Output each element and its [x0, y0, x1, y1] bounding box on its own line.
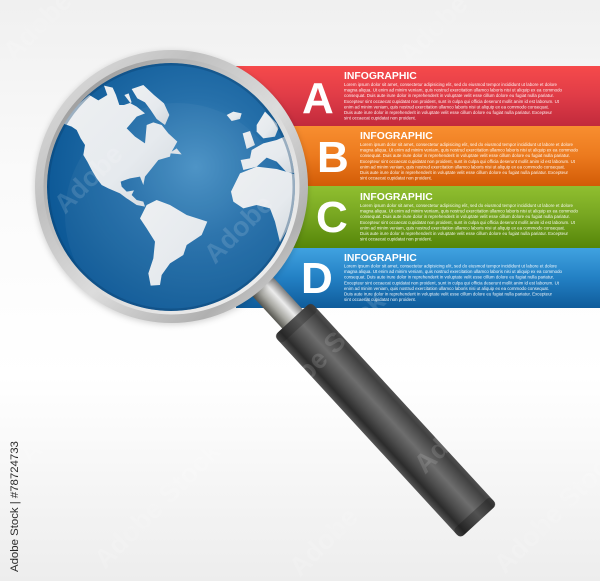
- watermarks: Adobe Stock: [88, 436, 227, 574]
- body text C: sint occaecat cupidatat non proident.: [360, 237, 432, 242]
- Scandinavia: [257, 112, 278, 138]
- heading A: INFOGRAPHIC: [344, 71, 417, 82]
- watermarks: Adobe: [283, 502, 364, 581]
- grip top cap: [274, 302, 318, 344]
- body text D: Duis aute irure dolor in reprehenderit in voluptate velit esse cillum dolore eu fugiat nulla pariatur. Excepteur: [344, 292, 553, 296]
- body text A: sint occaecat cupidatat non proident.: [344, 116, 416, 121]
- Africa: [231, 167, 300, 242]
- ribbon D: blue: [236, 248, 600, 308]
- letter C: C: [316, 193, 348, 242]
- body text A: [344, 82, 563, 121]
- ribbon B: orange: [236, 126, 600, 186]
- body text B: sint occaecat cupidatat non proident.: [360, 176, 432, 181]
- body text B: Duis aute irure dolor in reprehenderit in voluptate velit esse cillum dolore eu fugiat nulla pariatur. Excepteur: [360, 170, 569, 175]
- body text D: enim ad minim veniam, quis nostrud exercitation ullamco laboris nisi ut aliquip ex ea commodo consequat.: [344, 286, 549, 291]
- body text B: [360, 142, 579, 181]
- ribbon C: green: [236, 186, 600, 248]
- body text D: consequat. Duis aute irure dolor in reprehenderit in voluptate velit esse cillum dolore eu fugiat nulla pariatur.: [344, 275, 554, 280]
- stock credit: Adobe Stock | #78724733: [9, 441, 21, 572]
- inner glass highlight: [65, 155, 280, 308]
- watermarks: Adobe Stock: [13, 331, 152, 469]
- letter A: A: [302, 74, 334, 123]
- body text A: Duis aute irure dolor in reprehenderit in voluptate velit esse cillum dolore eu fugiat nulla pariatur. Excepteur: [344, 110, 553, 115]
- South America: [140, 200, 207, 286]
- body text A: magna aliqua. Ut enim ad minim veniam, quis nostrud exercitation ullamco laboris nisi ut aliquip ex ea commodo: [344, 88, 563, 93]
- body text C: Lorem ipsum dolor sit amet, consectetur adipisicing elit, sed do eiusmod tempor incididunt ut labore et dolore: [360, 203, 574, 208]
- body text B: enim ad minim veniam, quis nostrud exercitation ullamco laboris nisi ut aliquip ex ea commodo consequat.: [360, 164, 565, 169]
- continents: [63, 85, 300, 286]
- body text D: Lorem ipsum dolor sit amet, consectetur adipisicing elit, sed do eiusmod tempor incididunt ut labore et dolore: [344, 264, 558, 268]
- body text A: consequat. Duis aute irure dolor in reprehenderit in voluptate velit esse cillum dolore eu fugiat nulla pariatur.: [344, 93, 554, 98]
- heading C: INFOGRAPHIC: [360, 192, 433, 203]
- watermarks: Adobe: [48, 139, 129, 219]
- body text B: Excepteur sint occaecat cupidatat non proident, sunt in culpa qui officia deserunt mollit anim id est laborum. Ut: [360, 159, 576, 164]
- body text C: enim ad minim veniam, quis nostrud exercitation ullamco laboris nisi ut aliquip ex ea commodo consequat.: [360, 225, 565, 230]
- lens with world map: [47, 63, 300, 327]
- letter B: B: [317, 133, 349, 182]
- Arctic islands: [132, 85, 169, 125]
- body text C: Duis aute irure dolor in reprehenderit in voluptate velit esse cillum dolore eu fugiat nulla pariatur. Excepteur: [360, 231, 569, 236]
- watermarks: Adobe Stock: [253, 286, 392, 424]
- heading D: INFOGRAPHIC: [344, 253, 417, 264]
- ribbon A: red: [236, 66, 600, 126]
- body text C: [360, 203, 579, 242]
- magnifying glass handle: [239, 264, 497, 538]
- body text A: enim ad minim veniam, quis nostrud exercitation ullamco laboris nisi ut aliquip ex ea commodo consequat.: [344, 104, 549, 109]
- Iceland: [227, 112, 242, 121]
- Europe: [240, 136, 294, 173]
- body text D: Excepteur sint occaecat cupidatat non proident, sunt in culpa qui officia deserunt mollit anim id est laborum. Ut: [344, 280, 560, 285]
- North America: [63, 86, 182, 207]
- heading B: INFOGRAPHIC: [360, 131, 433, 142]
- lens drop shadow: [34, 51, 308, 325]
- body text A: Lorem ipsum dolor sit amet, consectetur adipisicing elit, sed do eiusmod tempor incididunt ut labore et dolore: [344, 82, 558, 87]
- body text C: magna aliqua. Ut enim ad minim veniam, quis nostrud exercitation ullamco laboris nisi ut aliquip ex ea commodo: [360, 209, 579, 214]
- British Isles: [243, 131, 255, 149]
- watermarks: Adobe Stock: [408, 341, 547, 479]
- body text A: Excepteur sint occaecat cupidatat non proident, sunt in culpa qui officia deserunt mollit anim id est laborum. Ut: [344, 99, 560, 104]
- handle metal neck: [247, 271, 306, 331]
- body text C: consequat. Duis aute irure dolor in reprehenderit in voluptate velit esse cillum dolore eu fugiat nulla pariatur.: [360, 214, 570, 219]
- ocean: [47, 63, 295, 311]
- body text B: magna aliqua. Ut enim ad minim veniam, quis nostrud exercitation ullamco laboris nisi ut aliquip ex ea commodo: [360, 148, 579, 153]
- body text B: consequat. Duis aute irure dolor in reprehenderit in voluptate velit esse cillum dolore eu fugiat nulla pariatur.: [360, 153, 570, 158]
- handle grip: [274, 302, 497, 538]
- magnifier metal ring: [35, 50, 308, 323]
- lens rim shading: [48, 64, 294, 310]
- body text D: [344, 264, 563, 302]
- body text D: sint occaecat cupidatat non proident.: [344, 297, 416, 302]
- watermarks: Adobe: [198, 189, 279, 269]
- body text B: Lorem ipsum dolor sit amet, consectetur adipisicing elit, sed do eiusmod tempor incididunt ut labore et dolore: [360, 142, 574, 147]
- letter D: D: [301, 254, 333, 303]
- body text C: Excepteur sint occaecat cupidatat non proident, sunt in culpa qui officia deserunt mollit anim id est laborum. Ut: [360, 220, 576, 225]
- grip bottom cap: [453, 496, 497, 538]
- body text D: magna aliqua. Ut enim ad minim veniam, quis nostrud exercitation ullamco laboris nisi ut aliquip ex ea commodo: [344, 269, 563, 274]
